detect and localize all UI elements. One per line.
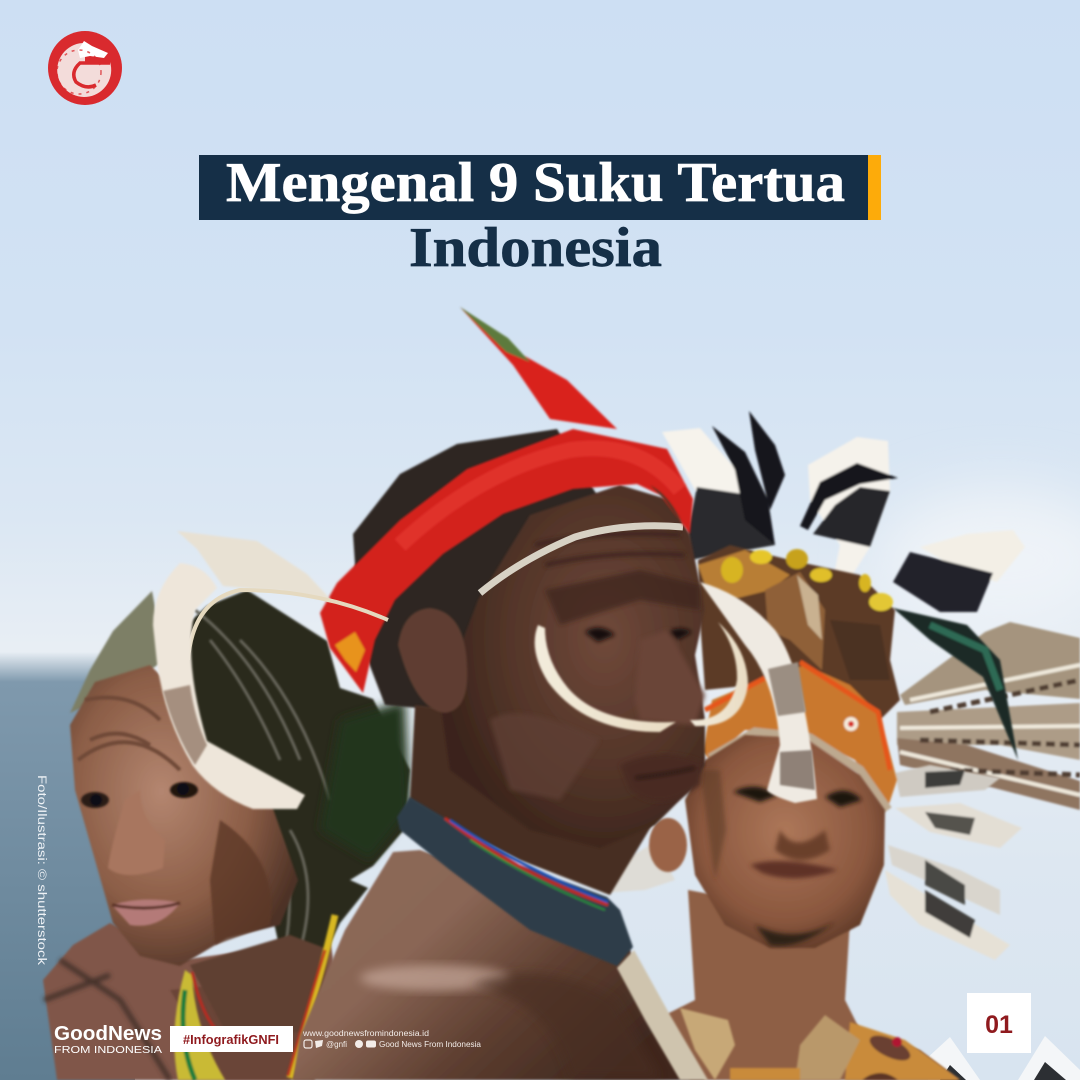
head: [440, 485, 705, 848]
distant building roofs: [925, 1036, 1080, 1080]
footer branding: #InfografikGNFI: [183, 1033, 279, 1047]
photo credit: Foto/Ilustrasi: © shutterstock: [35, 775, 47, 965]
footer branding: GoodNews: [54, 1023, 162, 1045]
footer branding: www.goodnewsfromindonesia.id: [302, 1029, 429, 1038]
neck: [410, 705, 655, 895]
footer branding: FROM INDONESIA: [54, 1044, 162, 1056]
nose tusk left: [535, 625, 676, 732]
red feather band: [320, 429, 693, 693]
bead necklaces: [174, 915, 335, 1080]
facial features: [700, 770, 862, 946]
face: [685, 735, 885, 948]
footer branding: @gnfi: [326, 1040, 347, 1049]
left white feather: [177, 531, 333, 602]
title bar: Mengenal 9 Suku Tertua: [226, 152, 845, 214]
facial features: [78, 698, 271, 945]
neck and chest: [665, 890, 960, 1080]
grey hair at crown: [70, 591, 165, 713]
left curved tusk: [153, 563, 305, 809]
shell strap: [617, 950, 708, 1080]
figure: elderly woman: [43, 590, 410, 1080]
right curved tusk: [700, 582, 817, 803]
tusk and feather overlay: [153, 531, 817, 809]
feathers: pheasant plumes: [897, 622, 1080, 810]
footer branding: [54, 1023, 482, 1056]
neck band: [397, 797, 633, 966]
feathers: top black and white: [662, 411, 1025, 760]
ear: [649, 818, 687, 872]
page number: [967, 993, 1031, 1053]
neck shadow: [190, 935, 330, 1040]
white bead headband: [480, 526, 683, 593]
shoulders: [43, 923, 340, 1080]
logo: GNFI dragon circle: [48, 31, 122, 105]
figure: central man: [293, 307, 708, 1080]
headdress crown: [698, 545, 900, 810]
title second line: Indonesia: [409, 217, 662, 279]
red crest feather: [460, 307, 617, 429]
footer branding: Good News From Indonesia: [379, 1040, 482, 1049]
figure: right man with feather headdress: [603, 411, 1080, 1080]
thin quill arc: [188, 590, 388, 660]
necklace and vest: [680, 1008, 960, 1080]
page number: 01: [985, 1011, 1013, 1039]
face: [70, 665, 298, 966]
dark hair: [160, 590, 410, 965]
feathers: lower white and black: [603, 765, 1022, 960]
torso: [293, 850, 705, 1080]
nose tusk right: [690, 622, 748, 726]
facial features: [490, 534, 705, 801]
ear: [398, 608, 467, 713]
hair: [353, 429, 600, 710]
